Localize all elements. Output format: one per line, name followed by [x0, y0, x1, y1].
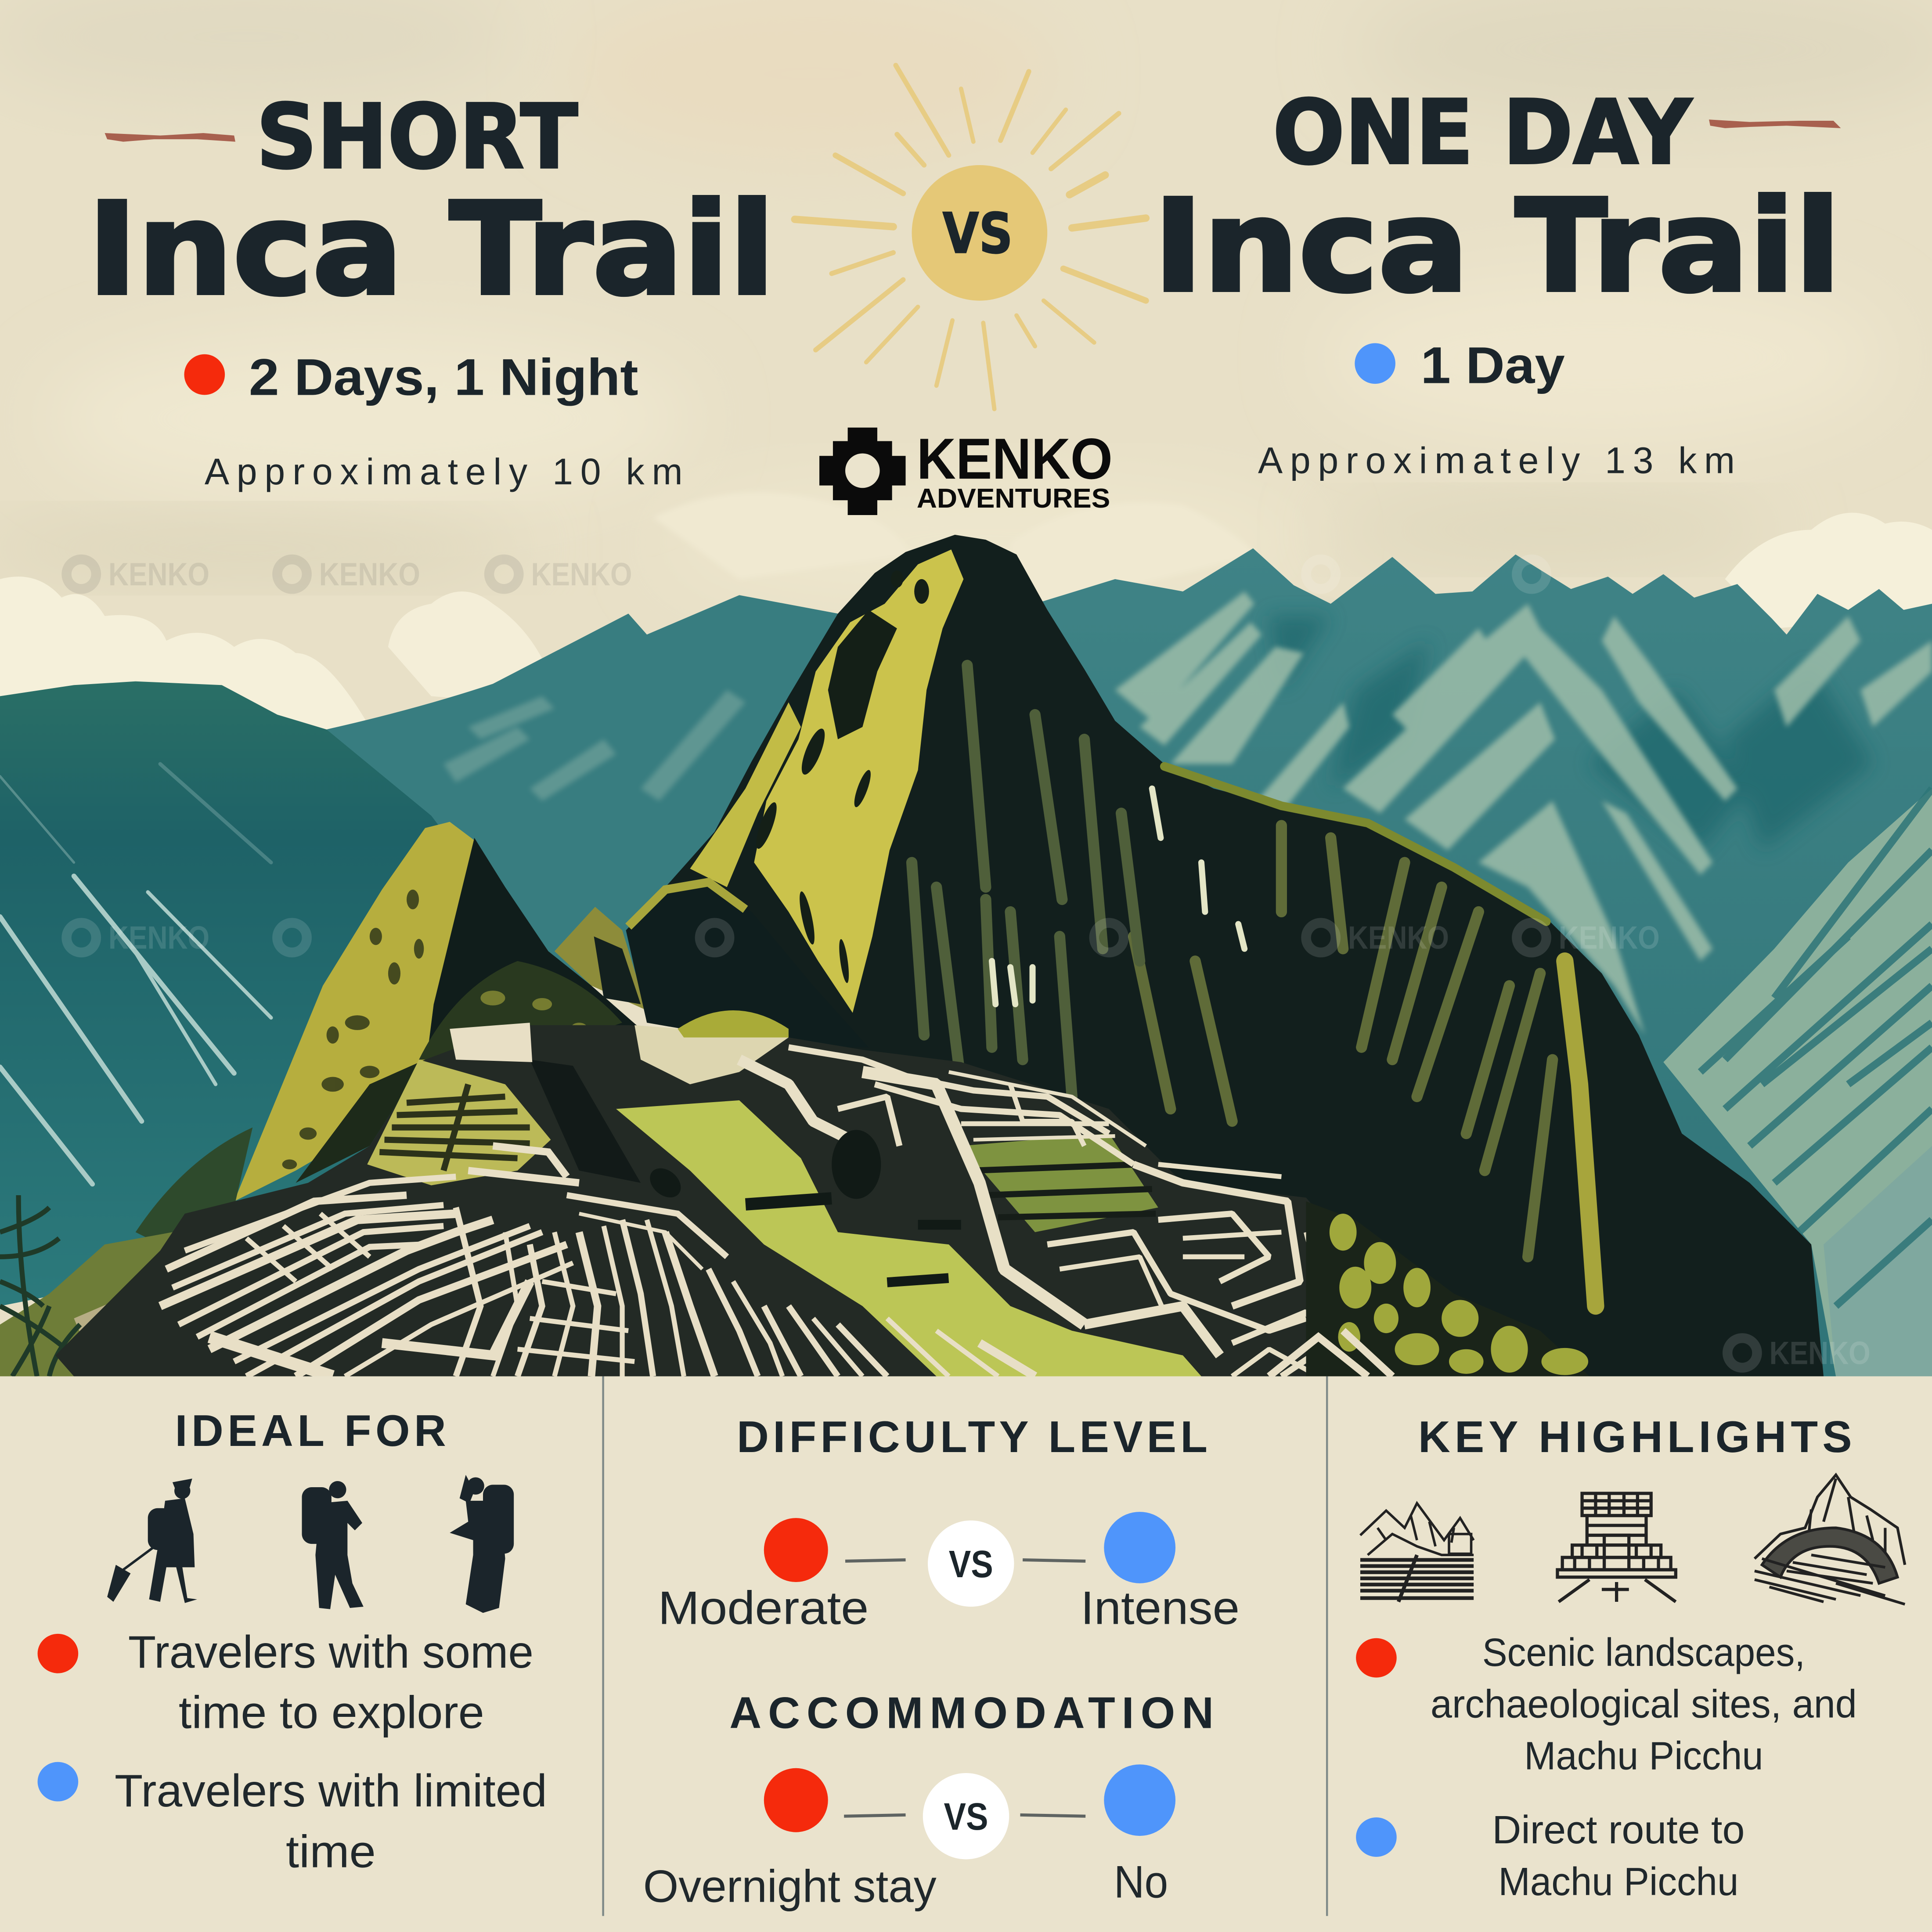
- right terraces block: [961, 1134, 1158, 1232]
- right lower mossy ruins: [1269, 1201, 1590, 1376]
- panel dividers: [603, 1376, 1327, 1916]
- bullet: travelers with some time: Travelers with some: [128, 1627, 533, 1678]
- bullet: direct route: Direct route to: [1492, 1808, 1745, 1852]
- bullet: scenic landscapes: [1356, 1631, 1857, 1778]
- icon: traveler looking at map: [450, 1475, 514, 1613]
- watermarks: KENKO: [1348, 920, 1449, 956]
- bullet: travelers with limited time: [38, 1762, 547, 1878]
- duration: 1 day: [1355, 336, 1565, 394]
- bullet: travelers with limited time: Travelers with limited: [115, 1766, 547, 1817]
- bullet: direct route: [1356, 1808, 1745, 1904]
- far centre mountain: [327, 595, 838, 986]
- duration: 2 days, 1 night: 2 Days, 1 Night: [249, 348, 638, 406]
- far right mountain range: [1035, 548, 1932, 1376]
- bullet: travelers with some time: time to explore: [179, 1687, 484, 1738]
- watermarks: KENKO: [319, 557, 420, 592]
- watermarks: KENKO: [1559, 920, 1660, 956]
- comparison: moderate vs intense: [658, 1512, 1240, 1634]
- right title: One Day Inca Trail: ONE DAY: [1273, 81, 1693, 184]
- bullet: direct route: Machu Picchu: [1498, 1860, 1738, 1904]
- panel: accommodation: [643, 1689, 1214, 1912]
- panel: ideal for: [38, 1406, 547, 1878]
- logo: Kenko Adventures: KENKO: [917, 426, 1113, 491]
- right ridge olive highlights: [912, 665, 1596, 1306]
- clouds: [0, 492, 1932, 739]
- left terraces: [367, 1060, 551, 1185]
- icon: landscape engraving: [1360, 1503, 1474, 1602]
- dark trees and shadows on lawn: [644, 1130, 961, 1287]
- right title: One Day Inca Trail: [1153, 81, 1841, 321]
- lower left ruins stripes: [160, 1146, 1035, 1376]
- comparison: overnight stay vs no: No: [1114, 1856, 1168, 1907]
- heading: accommodation: ACCOMMODATION: [729, 1689, 1214, 1738]
- paper sky background: [0, 0, 1932, 1376]
- bullet: travelers with limited time: time: [286, 1827, 376, 1878]
- panel: difficulty level: [658, 1413, 1240, 1634]
- heading: ideal for: IDEAL FOR: [175, 1406, 446, 1456]
- ruins of Machu Picchu: [55, 1010, 1590, 1376]
- main peak dark mass: [665, 535, 1824, 1376]
- panel: key highlights: [1356, 1413, 1905, 1904]
- small humps by the peak: [555, 882, 869, 1047]
- icon: sun with VS: VS: [943, 201, 1013, 266]
- left title: Short Inca Trail: SHORT: [256, 85, 578, 189]
- duration: 1 day: 1 Day: [1420, 336, 1565, 394]
- icon: traveler with backpack: [302, 1481, 364, 1609]
- icon: sun with VS: [795, 65, 1146, 409]
- mountain scene: [0, 535, 1932, 1376]
- yellow face of the peak: [754, 550, 963, 1013]
- right lower slope: [1663, 789, 1932, 1376]
- distance right: Approximately 13 km: [1258, 440, 1735, 481]
- comparison: moderate vs intense: Moderate: [658, 1581, 869, 1634]
- bullet: scenic landscapes: archaeological sites, and: [1431, 1683, 1857, 1727]
- left title: Short Inca Trail: [87, 85, 775, 324]
- comparison: moderate vs intense: VS: [949, 1543, 993, 1586]
- bullet: scenic landscapes: Machu Picchu: [1524, 1734, 1763, 1778]
- icon: stone gate engraving: [1557, 1493, 1676, 1602]
- comparison: overnight stay vs no: Overnight stay: [643, 1861, 937, 1912]
- heading: difficulty level: DIFFICULTY LEVEL: [737, 1413, 1208, 1462]
- left title: Short Inca Trail: Inca Trail: [87, 176, 775, 324]
- comparison: moderate vs intense: Intense: [1081, 1581, 1240, 1634]
- bullet: travelers with some time: [38, 1627, 533, 1738]
- logo: Kenko Adventures: [819, 426, 1113, 515]
- comparison: overnight stay vs no: VS: [944, 1795, 988, 1838]
- right title: One Day Inca Trail: Inca Trail: [1153, 173, 1841, 321]
- left small peak: [136, 822, 641, 1244]
- watermarks: KENKO: [108, 920, 209, 956]
- heading: key highlights: KEY HIGHLIGHTS: [1418, 1413, 1852, 1462]
- watermarks: [67, 557, 1871, 1371]
- comparison: overnight stay vs no: [643, 1764, 1175, 1912]
- watermarks: KENKO: [1770, 1335, 1871, 1371]
- bullet: scenic landscapes: Scenic landscapes,: [1482, 1631, 1805, 1675]
- ground foliage left: [0, 1195, 197, 1376]
- bottom panel background: [0, 1376, 1932, 1932]
- logo: Kenko Adventures: ADVENTURES: [917, 483, 1110, 514]
- icon: traveler with suitcase: [107, 1478, 197, 1603]
- watermarks: KENKO: [108, 557, 209, 592]
- central lawn: [616, 1100, 1201, 1376]
- icon: Machu Picchu engraving: [1755, 1475, 1905, 1604]
- central temples: [739, 1047, 1331, 1376]
- distance left: Approximately 10 km: [205, 451, 683, 492]
- left mountain: [0, 681, 438, 1306]
- watermarks: KENKO: [531, 557, 632, 592]
